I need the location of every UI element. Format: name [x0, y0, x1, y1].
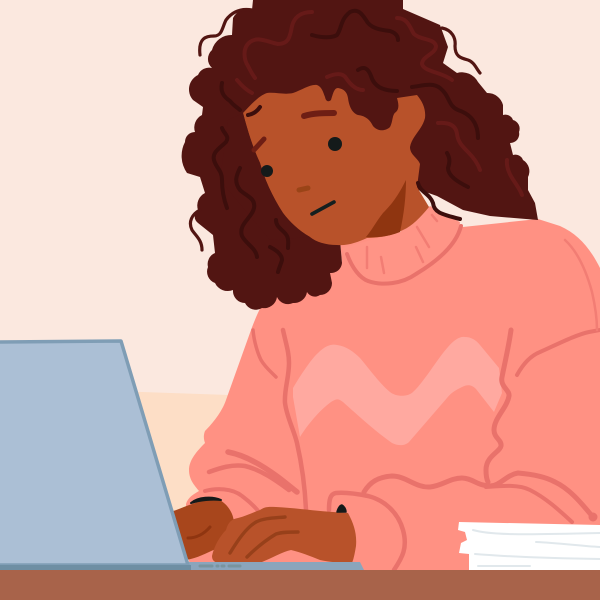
face — [243, 85, 429, 245]
eyebrow right — [304, 113, 334, 116]
light curls — [237, 12, 522, 195]
laptop base slots — [200, 564, 240, 568]
laptop screen back — [0, 341, 188, 565]
collar outline — [347, 226, 461, 284]
right hand — [212, 505, 356, 563]
dark curls — [214, 11, 478, 272]
left hair strand over face — [220, 113, 310, 240]
hair mass — [182, 0, 538, 310]
sweater fold lines — [283, 330, 306, 510]
neck shadow — [366, 180, 406, 237]
laptop — [0, 341, 364, 570]
nose — [299, 188, 308, 190]
black nail — [337, 505, 346, 512]
background panel: tan box — [120, 391, 260, 570]
mouth — [312, 202, 334, 214]
eye right — [328, 137, 342, 151]
collar ribs — [367, 215, 437, 273]
eye left — [261, 165, 273, 177]
finger creases — [230, 517, 298, 557]
black nail — [191, 498, 221, 503]
collar — [342, 206, 460, 285]
eyebrow left — [254, 139, 264, 150]
laptop bottom strip — [0, 565, 191, 570]
desk — [0, 570, 600, 600]
stray curls — [190, 9, 480, 250]
sweater — [186, 206, 600, 570]
hand shape — [212, 507, 356, 563]
paper stack — [458, 522, 600, 570]
sweater body — [186, 219, 600, 570]
sweater zigzag stripe — [293, 337, 502, 445]
hair — [182, 0, 538, 310]
stack of papers — [458, 522, 600, 570]
hand crease — [188, 527, 210, 538]
left hand — [170, 498, 234, 560]
palm — [170, 499, 234, 560]
laptop base — [189, 562, 364, 570]
paper lines — [473, 530, 600, 566]
